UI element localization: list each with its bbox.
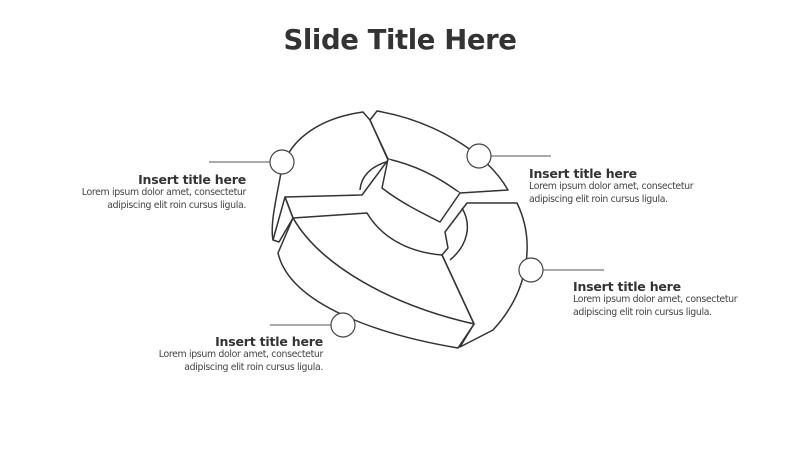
text block: bottom: Insert title here [215,334,323,349]
segment: bottom-front [278,213,474,348]
title: Slide Title Here [283,24,517,56]
segment: top-right [370,111,508,222]
segment: right [442,203,527,347]
text block: left [82,172,246,210]
text block: bottom: adipiscing elit roin cursus ligula. [184,362,323,372]
segment: top-left [272,112,388,242]
text block: right: adipiscing elit roin cursus ligula. [573,306,712,318]
text block: top right: Insert title here [529,166,637,181]
text block: left: adipiscing elit roin cursus ligula. [107,200,246,210]
text block: left: Lorem ipsum dolor amet, consectetur [82,187,246,198]
marker circles [270,144,543,337]
connector lines [209,156,604,325]
text block: right [573,279,738,318]
text block: top right [529,166,694,204]
text block: right: Lorem ipsum dolor amet, consectetur [573,294,737,305]
text block: left: Insert title here [138,172,246,187]
text block: top right: adipiscing elit roin cursus ligula. [529,194,668,204]
segment: inner hole back [360,162,467,260]
text block: top right: Lorem ipsum dolor amet, consectetur [529,181,693,192]
text block: bottom [159,334,324,372]
text block: right: Insert title here [573,279,681,294]
text block: bottom: Lorem ipsum dolor amet, consectetur [159,349,323,360]
